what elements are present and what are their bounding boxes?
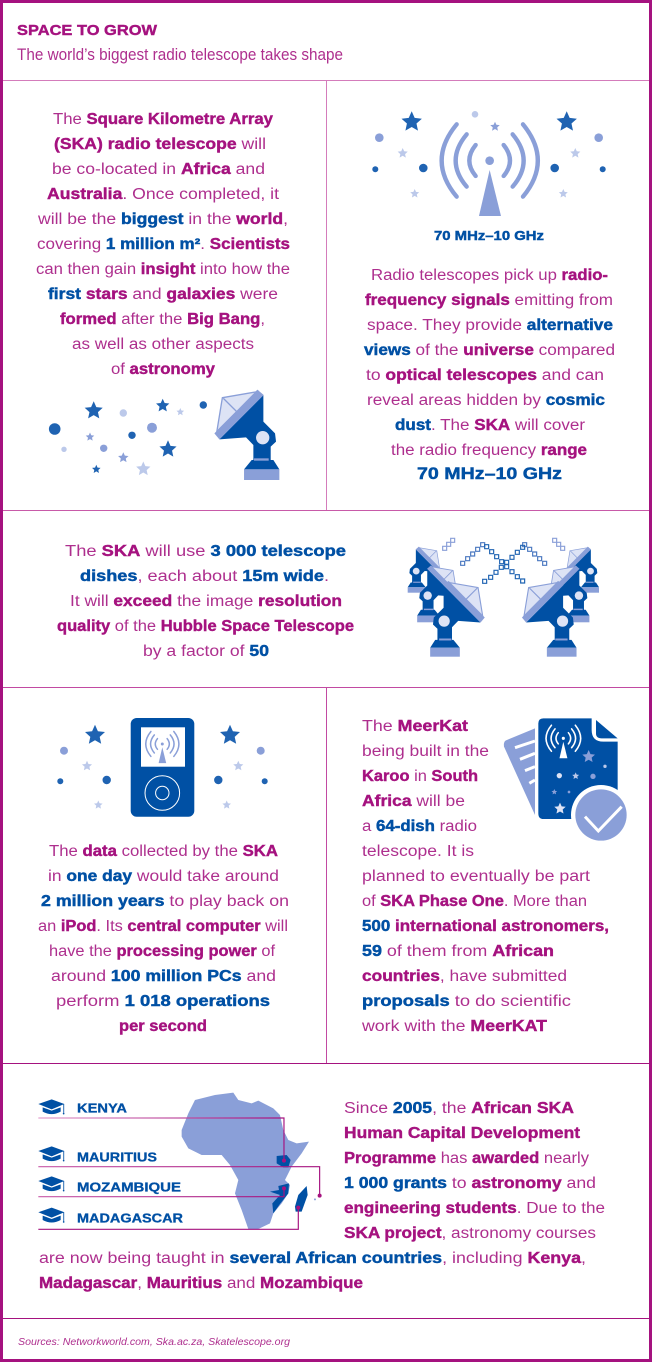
text block: what is the SKA bbox=[36, 111, 290, 378]
text block: MeerKAT: being built in the bbox=[362, 743, 489, 760]
text block: what is the SKA: be co-located in Africa and bbox=[52, 161, 265, 178]
icon: radio tower with stars bbox=[372, 111, 606, 216]
text block: data volume: in one day would take around bbox=[48, 868, 279, 885]
illustration: stars and radio dish bbox=[49, 390, 279, 480]
text block: data volume: per second bbox=[119, 1018, 207, 1035]
text block: data volume: around 100 million PCs and bbox=[51, 968, 276, 985]
text block: human capital programme: SKA project , astronomy courses bbox=[344, 1225, 596, 1242]
text block: radio telescopes: views of the universe compared bbox=[364, 342, 615, 359]
text block: what is the SKA: first stars and galaxies were bbox=[48, 286, 278, 303]
text block: human capital programme bbox=[39, 1100, 605, 1292]
text block: what is the SKA: The Square Kilometre Array bbox=[53, 111, 273, 128]
text block: dishes and resolution: It will exceed the image resolution bbox=[70, 593, 342, 610]
sources: Sources: Networkworld.com, Ska.ac.za, Skatelescope.org bbox=[18, 1336, 290, 1348]
text block: MeerKAT: work with the MeerKAT bbox=[361, 1018, 548, 1035]
text block: data volume: 2 million years to play back on bbox=[41, 893, 289, 910]
text block: human capital programme: Madagascar , Mauritius and Mozambique bbox=[39, 1275, 363, 1292]
text block: dishes and resolution: The SKA will use 3 000 telescope bbox=[65, 543, 346, 560]
text block: radio telescopes: reveal areas hidden by cosmic bbox=[367, 392, 605, 409]
text block: data volume: an iPod. Its central computer will bbox=[38, 918, 288, 935]
text block: data volume bbox=[38, 843, 289, 1035]
illustration: dish array with signals bbox=[408, 538, 599, 657]
title bbox=[17, 22, 343, 64]
text block: human capital programme: 1 000 grants to astronomy and bbox=[344, 1175, 596, 1192]
text block: radio telescopes: dust. The SKA will cover bbox=[395, 417, 585, 434]
country label: Kenya bbox=[38, 1099, 128, 1116]
text block: what is the SKA: covering 1 million m² . Scientists bbox=[37, 236, 290, 253]
country label: Kenya: KENYA bbox=[77, 1100, 128, 1116]
text block: radio telescopes: frequency signals emitting from bbox=[365, 292, 613, 309]
text block: radio telescopes: 70 MHz–10 GHz bbox=[417, 464, 562, 483]
country label: Madagascar bbox=[38, 1208, 184, 1226]
text block: what is the SKA: of astronomy bbox=[111, 361, 215, 378]
illustration: iPod with stars bbox=[57, 718, 268, 817]
frequency label: 70 MHz–10 GHz bbox=[434, 228, 545, 243]
text block: MeerKAT: The MeerKat bbox=[362, 718, 468, 735]
map: Africa with highlighted countries bbox=[182, 1093, 316, 1229]
text block: dishes and resolution: quality of the Hubble Space Telescope bbox=[57, 618, 354, 635]
text block: radio telescopes: to optical telescopes and can bbox=[366, 367, 604, 384]
connector lines from labels to countries bbox=[38, 1118, 322, 1229]
text block: MeerKAT: Africa will be bbox=[362, 793, 465, 810]
text block: human capital programme: engineering students . Due to the bbox=[344, 1200, 605, 1217]
text block: human capital programme: Programme has awarded nearly bbox=[344, 1150, 589, 1167]
text block: what is the SKA: as well as other aspects bbox=[72, 336, 254, 353]
text block: radio telescopes bbox=[364, 267, 615, 483]
text block: human capital programme: Human Capital Development bbox=[344, 1125, 580, 1142]
title: SPACE TO GROW bbox=[17, 22, 158, 39]
text block: MeerKAT: telescope. It is bbox=[362, 843, 474, 860]
text block: MeerKAT: of SKA Phase One . More than bbox=[362, 893, 587, 910]
text block: radio telescopes: the radio frequency range bbox=[391, 442, 587, 459]
text block: MeerKAT: a 64-dish radio bbox=[362, 818, 477, 835]
text block: human capital programme: are now being taught in several African countries , including Kenya , bbox=[39, 1250, 586, 1267]
country label: Mozambique bbox=[38, 1176, 181, 1194]
text block: human capital programme: Since 2005 , the African SKA bbox=[344, 1100, 574, 1117]
text block: radio telescopes: space. They provide alternative bbox=[367, 317, 613, 334]
icon: proposal document with check mark bbox=[504, 718, 631, 845]
text block: MeerKAT: proposals to do scientific bbox=[362, 993, 571, 1010]
title: The world’s biggest radio telescope takes shape bbox=[17, 46, 343, 64]
text block: MeerKAT: 59 of them from African bbox=[362, 943, 554, 960]
country label: Mauritius: MAURITIUS bbox=[77, 1150, 157, 1164]
text block: what is the SKA: will be the biggest in the world , bbox=[37, 211, 288, 228]
country label: Mauritius bbox=[38, 1146, 157, 1164]
text block: data volume: The data collected by the SKA bbox=[49, 843, 278, 860]
text block: data volume: perform 1 018 operations bbox=[56, 993, 270, 1010]
country label: Madagascar: MADAGASCAR bbox=[77, 1210, 184, 1226]
text block: dishes and resolution bbox=[57, 543, 354, 660]
text block: what is the SKA: can then gain insight into how the bbox=[36, 261, 290, 278]
text block: data volume: have the processing power of bbox=[49, 943, 276, 960]
text block: MeerKAT: countries , have submitted bbox=[362, 968, 567, 985]
text block: MeerKAT: Karoo in South bbox=[362, 768, 478, 785]
text block: MeerKAT: 500 international astronomers, bbox=[362, 918, 609, 935]
text block: radio telescopes: Radio telescopes pick up radio- bbox=[371, 267, 608, 284]
text block: MeerKAT: planned to eventually be part bbox=[362, 868, 591, 885]
text block: what is the SKA: (SKA) radio telescope will bbox=[54, 136, 266, 153]
text block: dishes and resolution: by a factor of 50 bbox=[143, 643, 269, 660]
text block: MeerKAT bbox=[361, 718, 609, 1035]
country label: Mozambique: MOZAMBIQUE bbox=[77, 1180, 181, 1194]
text block: what is the SKA: Australia . Once completed, it bbox=[47, 186, 280, 203]
text block: dishes and resolution: dishes , each about 15m wide . bbox=[80, 568, 329, 585]
text block: what is the SKA: formed after the Big Bang , bbox=[60, 311, 265, 328]
